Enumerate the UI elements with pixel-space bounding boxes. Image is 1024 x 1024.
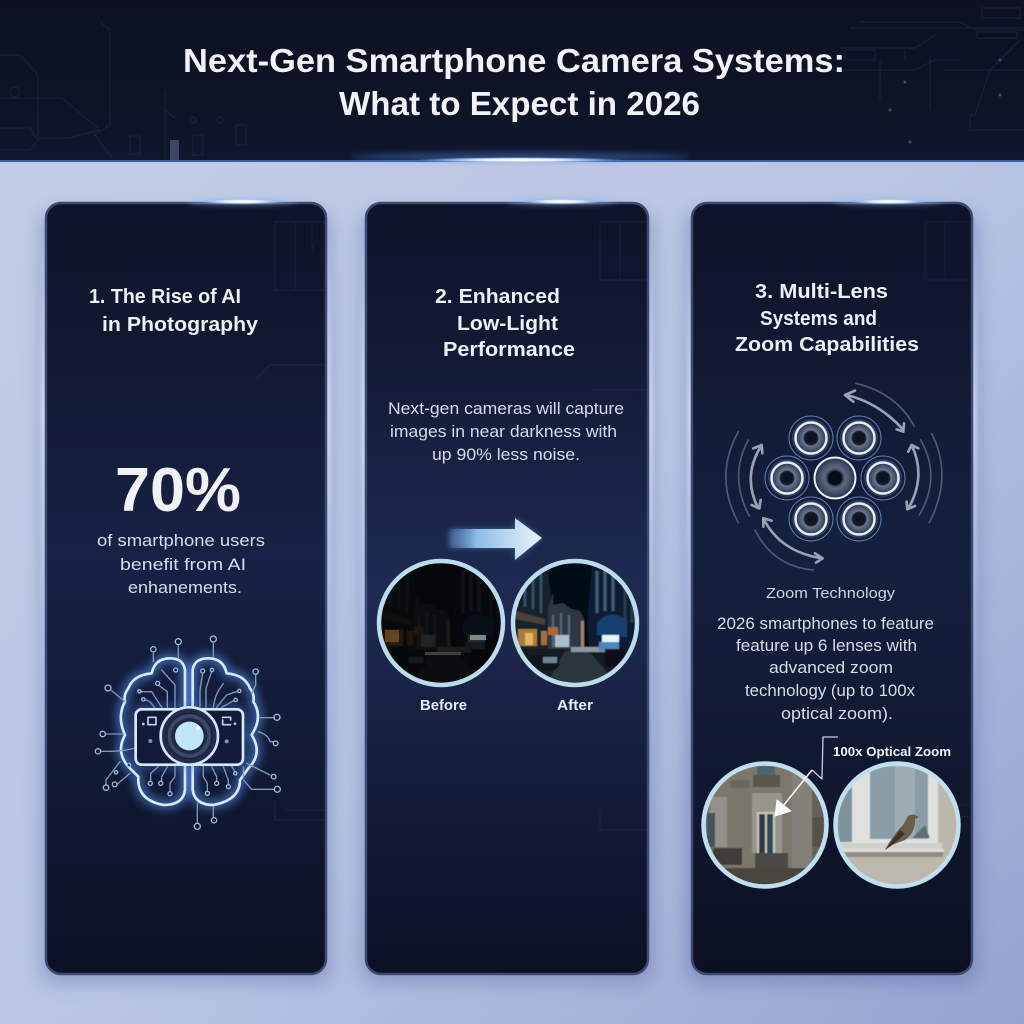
heading xyxy=(735,280,919,356)
heading xyxy=(89,285,259,336)
panel 1 circuit decoration xyxy=(255,222,325,820)
description xyxy=(717,615,934,723)
title: What to Expect in 2026 xyxy=(339,85,700,122)
rotation arrows xyxy=(726,383,942,570)
arrow: before to after xyxy=(449,518,542,560)
description: technology (up to 100x xyxy=(745,682,916,700)
photo: building xyxy=(700,760,830,890)
panel 2 shadow xyxy=(360,212,654,984)
panel: low-light performance xyxy=(366,197,648,974)
stat description: enhanements. xyxy=(128,579,242,597)
description: advanced zoom xyxy=(769,659,893,677)
heading: 2. Enhanced xyxy=(435,285,560,308)
panel edge glows xyxy=(42,230,976,750)
lenses xyxy=(765,416,905,541)
description: up 90% less noise. xyxy=(432,446,580,464)
photo: bird on window sill xyxy=(832,760,962,890)
stat: 70%: 70% xyxy=(115,456,241,525)
photo: before xyxy=(377,559,505,689)
heading: Systems and xyxy=(760,307,877,330)
panel: AI in photography xyxy=(46,197,326,974)
circuit pattern: header left xyxy=(0,22,246,160)
callout label: 100x optical zoom: 100x Optical Zoom xyxy=(833,744,951,759)
description: Next-gen cameras will capture xyxy=(388,400,624,418)
stat description xyxy=(97,532,265,597)
panel 1 shadow xyxy=(40,212,332,984)
label: after: After xyxy=(557,697,593,714)
heading: Performance xyxy=(443,338,575,361)
icon: lens cluster xyxy=(726,383,942,570)
panel: multi-lens systems xyxy=(692,197,972,974)
description: images in near darkness with xyxy=(390,423,617,441)
header band xyxy=(0,0,1024,160)
description: feature up 6 lenses with xyxy=(736,637,917,655)
panel 3 circuit decoration xyxy=(925,222,970,817)
subheading: zoom technology: Zoom Technology xyxy=(766,585,896,602)
description: 2026 smartphones to feature xyxy=(717,615,934,633)
title xyxy=(183,42,845,122)
circuit pattern: header right xyxy=(800,8,1024,130)
panel 3 shadow xyxy=(686,212,978,984)
panel 2 circuit decoration xyxy=(590,222,646,830)
stat description: of smartphone users xyxy=(97,532,265,550)
photo: after xyxy=(511,559,639,689)
description xyxy=(388,400,624,464)
heading: Low-Light xyxy=(457,312,558,335)
icon: AI brain camera xyxy=(95,636,280,829)
inner and outer traces xyxy=(101,642,275,823)
heading: 1. The Rise of AI xyxy=(89,285,241,308)
title: Next-Gen Smartphone Camera Systems: xyxy=(183,42,845,79)
stat description: benefit from AI xyxy=(120,556,246,574)
heading xyxy=(435,285,575,361)
description: optical zoom). xyxy=(781,705,893,723)
heading: Zoom Capabilities xyxy=(735,333,919,356)
header glow line xyxy=(0,152,1024,163)
heading: in Photography xyxy=(102,313,259,336)
label: before: Before xyxy=(420,697,467,714)
callout arrow: zoom target xyxy=(775,737,838,816)
heading: 3. Multi-Lens xyxy=(755,280,888,303)
